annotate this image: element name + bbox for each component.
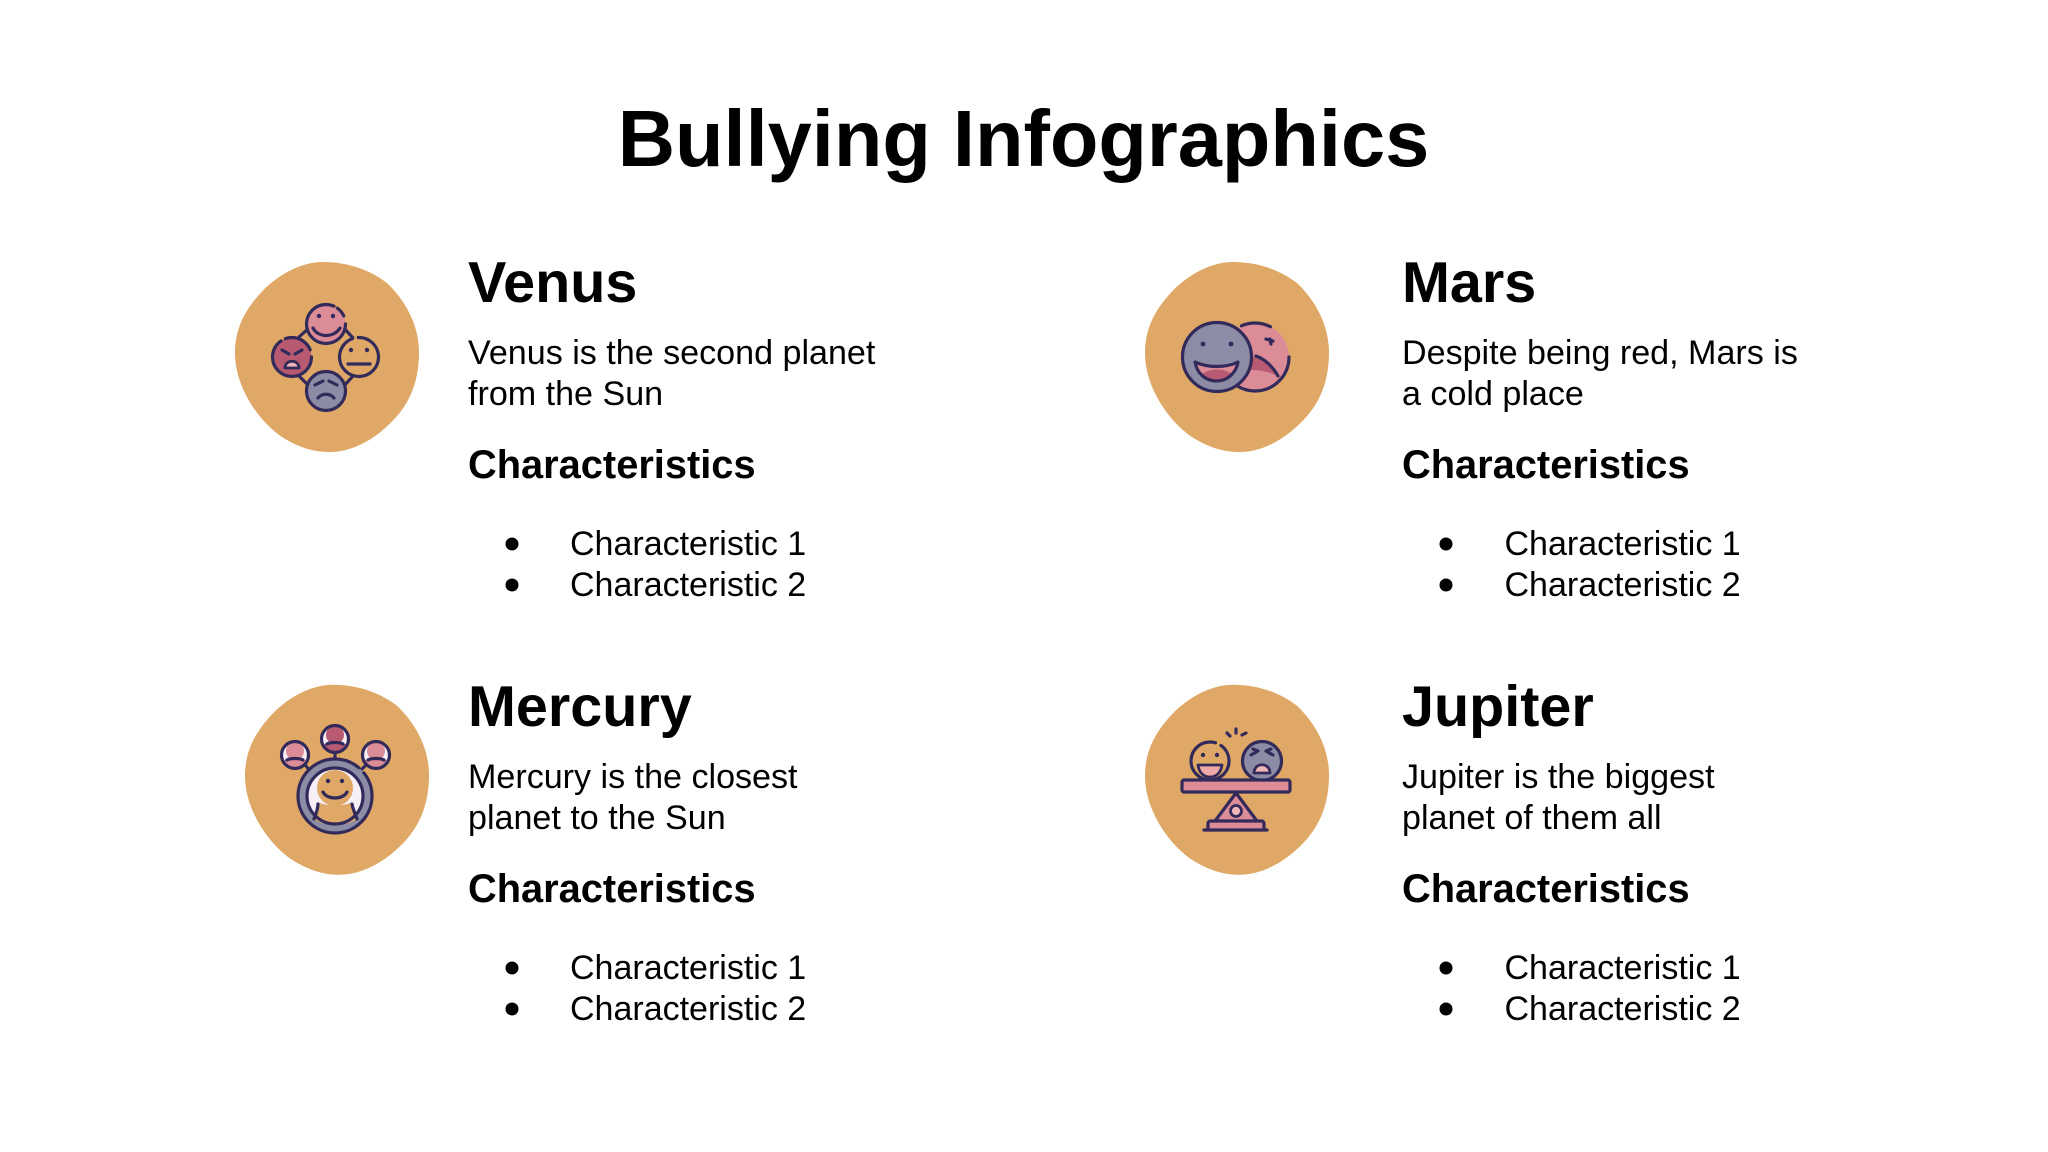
title: Bullying Infographics xyxy=(618,94,1429,183)
heading: Jupiter: Jupiter xyxy=(1402,675,1594,739)
bullet list: Mercury: Characteristic 1 xyxy=(570,949,806,987)
description: Venus: from the Sun xyxy=(468,375,663,413)
description: Mercury: planet to the Sun xyxy=(468,799,726,837)
bullet list: Venus: Characteristic 2 xyxy=(570,566,806,604)
description: Mars: Despite being red, Mars is xyxy=(1402,334,1798,372)
subheading: Venus characteristics: Characteristics xyxy=(468,443,756,487)
bullet list: Jupiter xyxy=(1440,949,1741,1028)
description: Jupiter: planet of them all xyxy=(1402,799,1662,837)
icon: two masks xyxy=(1145,262,1329,452)
icon: person in ring with three contacts xyxy=(245,685,429,875)
icon: four mood faces xyxy=(235,262,419,452)
bullet list: Venus: Characteristic 1 xyxy=(570,525,806,563)
panel: Venus xyxy=(235,251,876,604)
panel: Mercury xyxy=(245,675,806,1028)
panel: Mars xyxy=(1145,251,1798,604)
icon: balance scale with faces xyxy=(1145,685,1329,875)
subheading: Jupiter characteristics: Characteristics xyxy=(1402,867,1690,911)
panel: Jupiter xyxy=(1145,675,1741,1028)
bullet list: Mars xyxy=(1440,525,1741,604)
heading: Mars: Mars xyxy=(1402,251,1536,315)
bullet list: Venus xyxy=(506,525,806,604)
subheading: Mercury characteristics: Characteristics xyxy=(468,867,756,911)
heading: Mercury: Mercury xyxy=(468,675,692,739)
bullet list: Jupiter: Characteristic 2 xyxy=(1504,990,1741,1028)
bullet list: Mars: Characteristic 1 xyxy=(1504,525,1741,563)
description: Mars: a cold place xyxy=(1402,375,1584,413)
description: Mercury: Mercury is the closest xyxy=(468,758,798,796)
description: Venus: Venus is the second planet xyxy=(468,334,876,372)
bullet list: Mercury: Characteristic 2 xyxy=(570,990,806,1028)
bullet list: Jupiter: Characteristic 1 xyxy=(1504,949,1741,987)
heading: Venus: Venus xyxy=(468,251,637,315)
description: Jupiter: Jupiter is the biggest xyxy=(1402,758,1715,796)
bullet list: Mercury xyxy=(506,949,806,1028)
bullet list: Mars: Characteristic 2 xyxy=(1504,566,1741,604)
subheading: Mars characteristics: Characteristics xyxy=(1402,443,1690,487)
